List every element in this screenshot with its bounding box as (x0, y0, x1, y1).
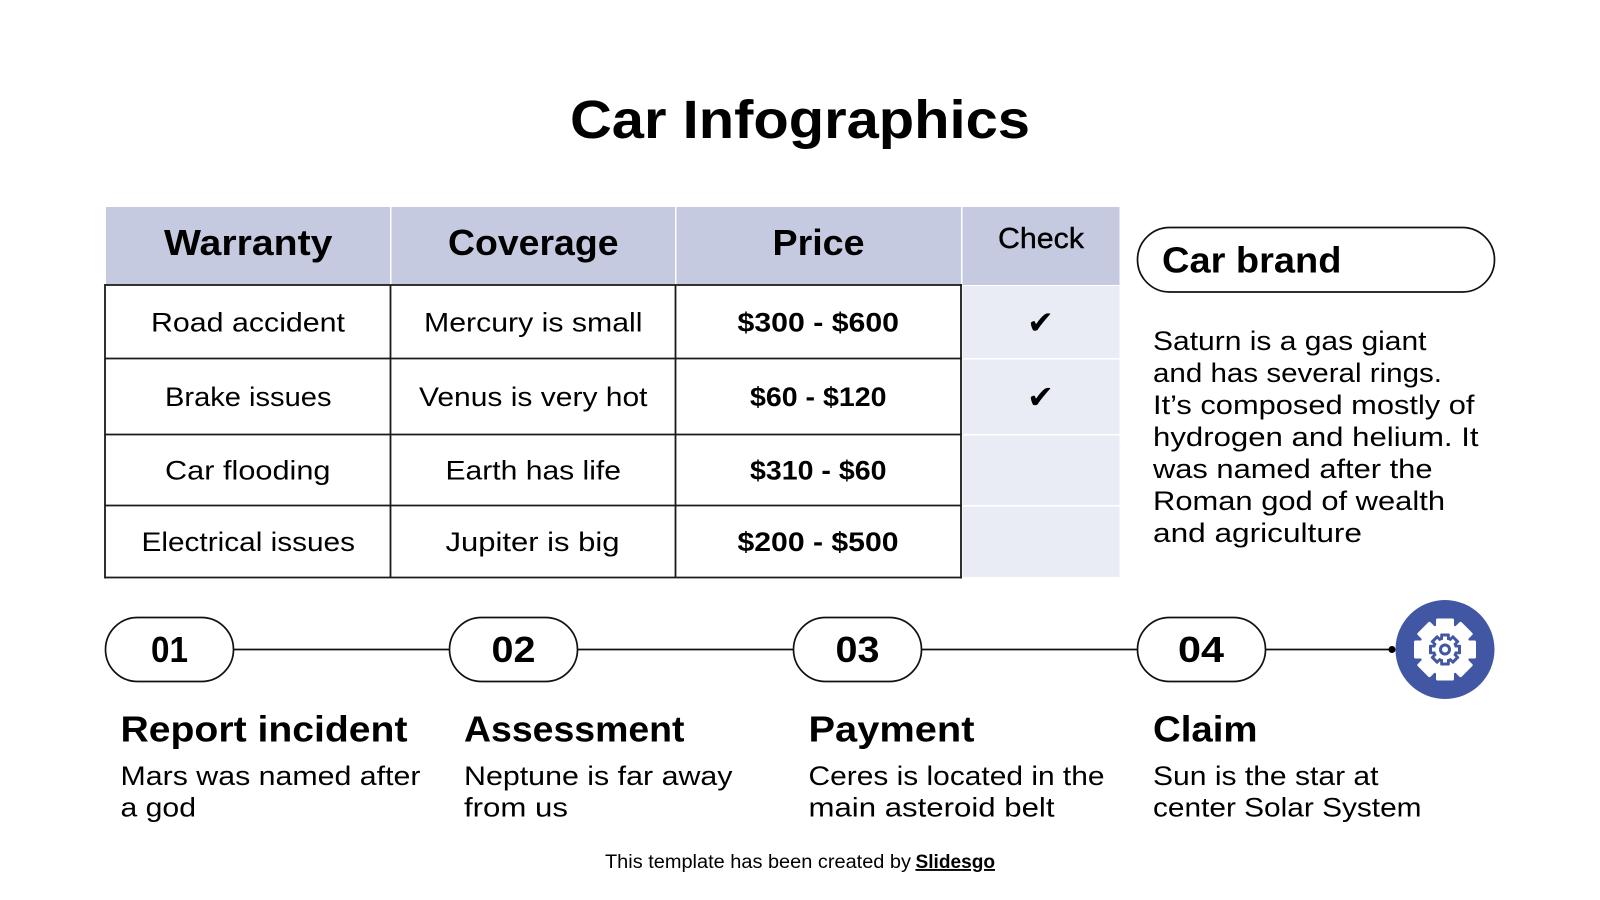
step 2 description (464, 761, 733, 822)
car brand pill (1138, 228, 1494, 292)
step 3 description: main asteroid belt (808, 792, 1055, 822)
step 1 (106, 618, 420, 822)
step 2 description: from us (464, 792, 568, 822)
step 3 description: Ceres is located in the (808, 761, 1104, 791)
step 4 description (1153, 761, 1422, 822)
car brand description: was named after the (1152, 454, 1432, 484)
step 1 description: a god (120, 792, 196, 822)
footer credit: This template has been created by (605, 852, 912, 873)
step 4 heading: Claim (1153, 708, 1258, 750)
step 2 number pill: 02 (492, 629, 536, 670)
car brand description: and has several rings. (1153, 358, 1442, 388)
row: brake issues: Venus is very hot (419, 382, 648, 412)
row: electrical issues: $200 - $500 (738, 527, 898, 557)
row: road accident (151, 308, 899, 338)
row: car flooding: Earth has life (446, 456, 621, 486)
car brand description: hydrogen and helium. It (1153, 422, 1479, 452)
row: road accident: $300 - $600 (738, 308, 899, 338)
step 1 number pill: 01 (151, 629, 188, 670)
table grid lines (105, 284, 962, 578)
table (105, 207, 1120, 578)
table header row (106, 207, 1120, 285)
table header row: Coverage (448, 222, 618, 263)
step 4 description: Sun is the star at (1153, 761, 1379, 791)
car brand description: and agriculture (1153, 518, 1362, 548)
row: brake issues (165, 382, 886, 412)
table header row: Price (772, 222, 864, 263)
step 4 description: center Solar System (1153, 792, 1422, 822)
row: electrical issues (142, 527, 898, 557)
row: car flooding: $310 - $60 (750, 456, 886, 486)
row: electrical issues: Electrical issues (142, 527, 355, 557)
step 1 description: Mars was named after (120, 761, 420, 791)
title: Car Infographics (570, 90, 1030, 150)
step 4 (1138, 618, 1422, 822)
row: electrical issues: Jupiter is big (446, 527, 620, 557)
row: car flooding (165, 456, 886, 486)
car brand description: Roman god of wealth (1153, 486, 1445, 516)
step 2 number pill (450, 618, 578, 682)
car brand pill: Car brand (1162, 240, 1342, 280)
row: brake issues: Brake issues (165, 382, 332, 412)
step 1 description (120, 761, 420, 822)
row: road accident: Mercury is small (424, 308, 642, 338)
step 2 (450, 618, 733, 822)
row: road accident: Road accident (151, 308, 346, 338)
table header row: Check (998, 223, 1085, 255)
row: brake issues: $60 - $120 (750, 382, 886, 412)
step 3 description (808, 761, 1104, 822)
car brand description: It’s composed mostly of (1153, 390, 1475, 420)
check column: ✔ (1027, 378, 1054, 416)
step 1 number pill (106, 618, 234, 682)
step 4 number pill: 04 (1178, 629, 1224, 670)
step 4 number pill (1138, 618, 1266, 682)
step 3 heading: Payment (808, 708, 974, 750)
table header row: Warranty (164, 222, 332, 263)
step 3 number pill: 03 (836, 629, 880, 670)
panel: car brand (1138, 228, 1494, 548)
check column: ✔ (1027, 304, 1054, 342)
row: car flooding: Car flooding (165, 456, 330, 486)
car brand description: Saturn is a gas giant (1153, 326, 1427, 356)
step 1 heading: Report incident (120, 708, 408, 750)
icon: gear (1396, 600, 1494, 699)
step 2 heading: Assessment (464, 708, 685, 750)
car brand description (1152, 326, 1479, 548)
footer credit: Slidesgo (916, 852, 995, 873)
step 2 description: Neptune is far away (464, 761, 733, 791)
step 3 number pill (794, 618, 922, 682)
check column (962, 286, 1120, 577)
timeline connector line (234, 646, 1396, 653)
step 3 (794, 618, 1104, 822)
